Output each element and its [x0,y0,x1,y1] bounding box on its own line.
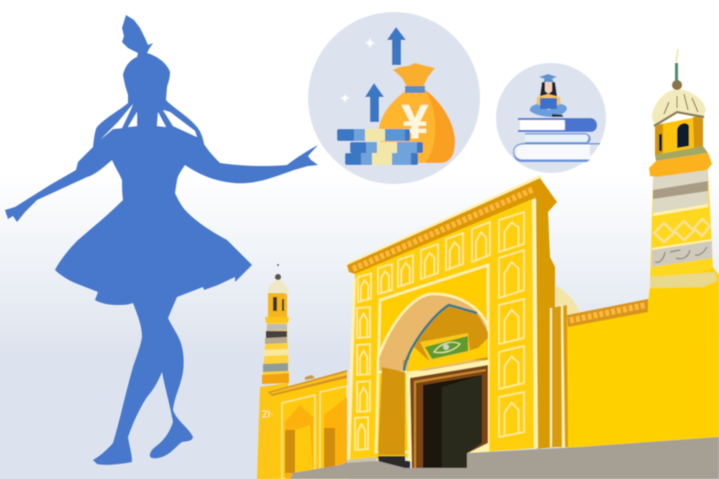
ground [290,437,719,479]
left pier [378,367,405,455]
calligraphy band [652,241,712,267]
lantern [655,116,703,156]
decorative panels [355,212,524,450]
portal side [535,196,555,449]
coin stacks [337,129,423,165]
black stone [378,456,410,471]
plaque [420,333,470,362]
dancer silhouette [5,15,318,465]
inner vault [403,305,488,372]
sparkles [340,38,375,102]
cornice [567,299,648,327]
arch [378,294,488,372]
dome [652,89,706,127]
door frame [406,360,488,462]
balcony [649,153,712,177]
right minaret [649,49,717,288]
right wall [567,266,719,479]
left minaret [257,264,290,479]
stack of books [513,118,600,162]
yellow tympanum [407,338,488,372]
dome behind portal [555,285,581,322]
cornice [347,175,542,266]
student figure [530,74,567,117]
circle: income growth [308,12,480,184]
circle: education [496,63,606,173]
arch recess [376,265,488,452]
pattern band [654,219,710,242]
arrow: large up [387,27,406,65]
lower pattern band [650,272,717,288]
yuan symbol: ¥ [402,95,428,148]
pillar beside portal [550,305,568,447]
main portal [347,175,557,471]
teal arch stroke [404,305,477,371]
door [423,375,482,468]
left wing [268,370,347,479]
braid gaps [100,104,197,140]
money bag [379,63,455,163]
arrow: small up [365,83,384,122]
